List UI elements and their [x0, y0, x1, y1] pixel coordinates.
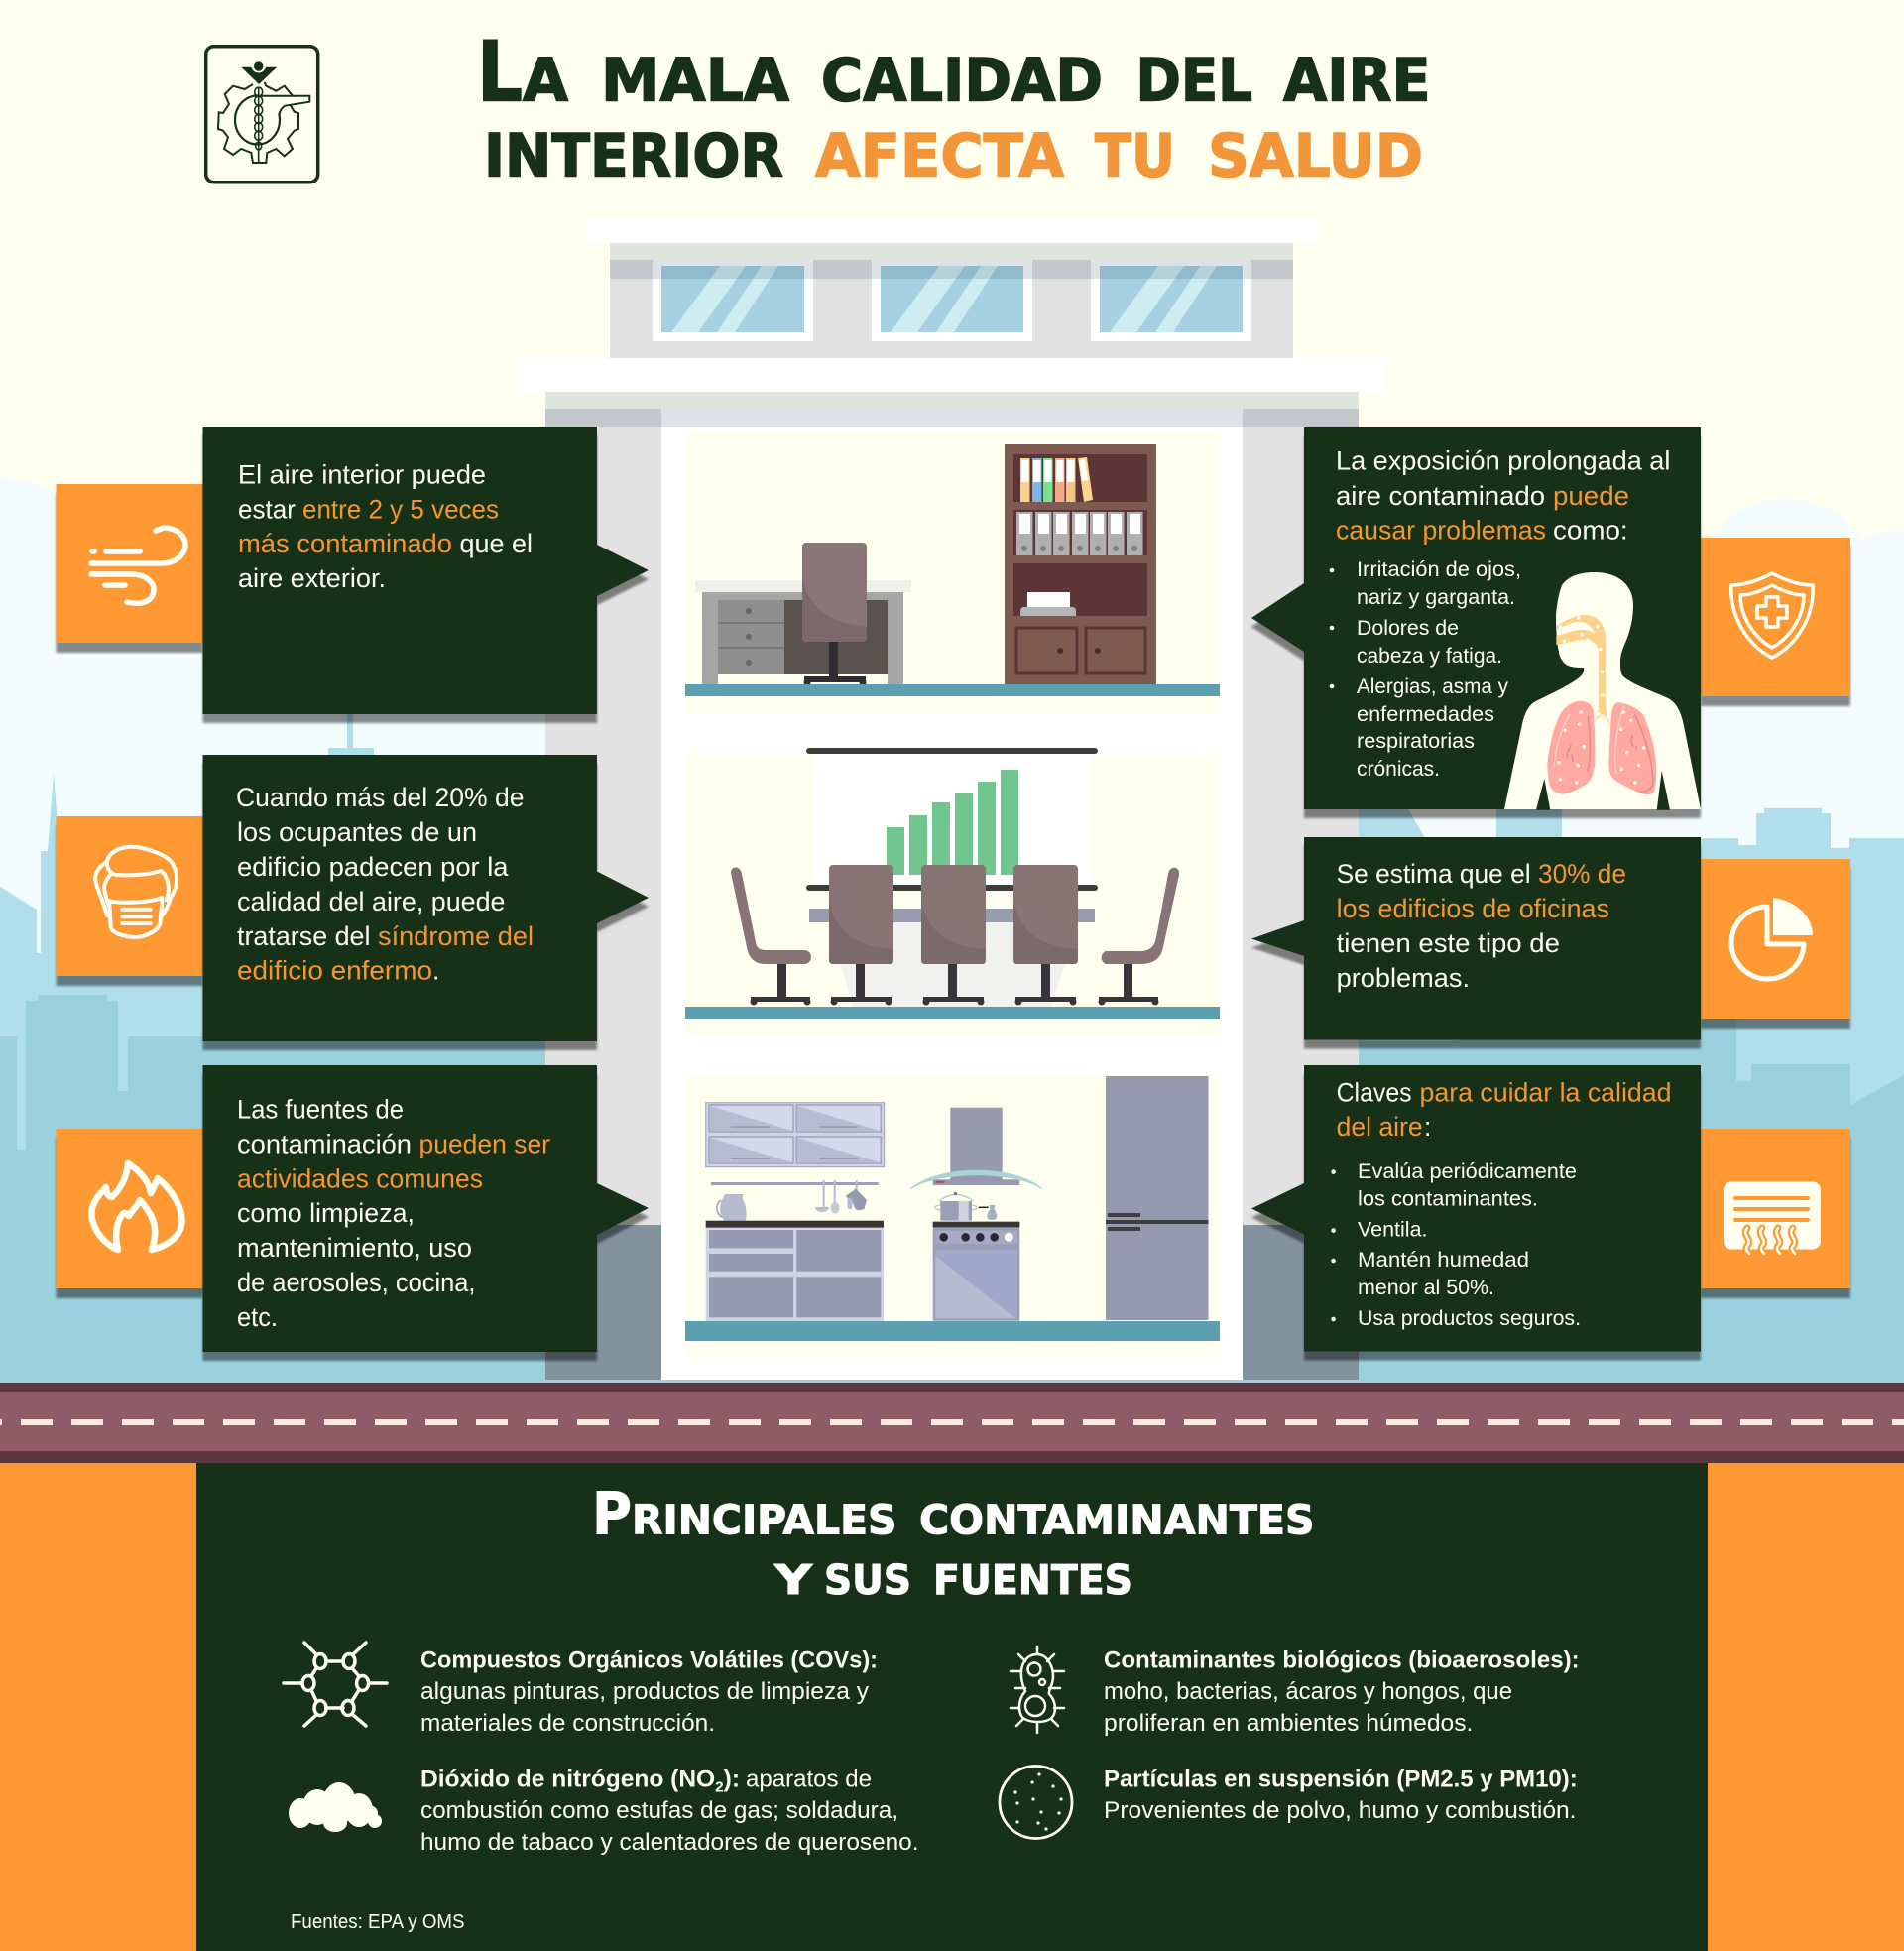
office chair — [802, 543, 867, 686]
columns — [545, 409, 661, 1380]
callout text: aire exterior. — [238, 563, 386, 593]
callout text: estar — [238, 494, 296, 524]
tips bullet list: Usa productos seguros. — [1358, 1306, 1581, 1330]
callout text — [236, 783, 534, 986]
icon: human respiratory system — [1504, 572, 1701, 810]
tips bullet list: Mantén humedad — [1358, 1248, 1529, 1272]
printer — [1020, 592, 1076, 616]
health bullet list: respiratorias — [1357, 729, 1475, 753]
tips bullet list: menor al 50%. — [1358, 1276, 1494, 1299]
callout text: actividades comunes — [237, 1164, 483, 1194]
callout text: . — [432, 956, 439, 986]
stove — [933, 1192, 1019, 1321]
bar chart — [887, 770, 1018, 875]
facade — [661, 409, 1243, 1380]
text: biological contaminants: proliferan en ambientes húmedos. — [1104, 1710, 1473, 1737]
health bullet list: crónicas. — [1357, 757, 1440, 781]
health bullet list: Dolores de — [1357, 616, 1459, 640]
top roof — [586, 217, 1318, 243]
health bullet list: cabeza y fatiga. — [1357, 644, 1502, 668]
text: particulate matter: Provenientes de polvo, humo y combustión. — [1104, 1797, 1577, 1824]
orange side bands — [0, 1463, 1904, 1951]
torch figure — [241, 58, 277, 84]
callout text: Las fuentes de — [237, 1095, 404, 1125]
tile: mask — [56, 816, 202, 986]
callout intro text: aire contaminado — [1336, 481, 1545, 511]
callout text: edificio padecen por la — [237, 852, 509, 882]
icon: wind — [91, 528, 185, 603]
icon: flame — [91, 1163, 181, 1250]
callout text: Cuando más del 20% de — [236, 783, 524, 812]
title line 2: TU — [1095, 121, 1175, 190]
panel: pollutants — [196, 1463, 1708, 1951]
section heading — [592, 1480, 1315, 1604]
text: nitrogen dioxide: Dióxido de nitrógeno (NO — [420, 1767, 709, 1793]
callout text: tratarse del — [237, 921, 371, 951]
meeting floor — [685, 1007, 1220, 1019]
callout intro text: causar problemas — [1336, 516, 1546, 546]
inner ring — [235, 95, 280, 145]
title line 2: AFECTA — [815, 121, 1065, 190]
section heading: Y — [774, 1556, 814, 1604]
lungs — [1547, 616, 1656, 794]
desk — [695, 580, 911, 685]
window 1 — [653, 260, 813, 341]
text: nitrogen dioxide: combustión como estufas de gas; soldadura, — [420, 1797, 898, 1824]
hood — [910, 1108, 1042, 1189]
projection screen — [812, 752, 1092, 891]
text: volatile organic compounds: algunas pinturas, productos de limpieza y — [420, 1678, 869, 1705]
callout intro text: como: — [1553, 516, 1628, 546]
health bullet list: Irritación de ojos, — [1357, 557, 1521, 581]
health bullet list: enfermedades — [1357, 702, 1494, 726]
table — [806, 885, 1098, 922]
text: nitrogen dioxide: humo de tabaco y calentadores de queroseno. — [420, 1829, 918, 1856]
right orange icon tiles — [1701, 538, 1850, 1298]
callout: interior air — [202, 427, 649, 723]
section heading: SUS — [824, 1556, 911, 1604]
health bullet list: Alergias, asma y — [1357, 674, 1508, 698]
sources: Fuentes: EPA y OMS — [291, 1911, 464, 1933]
white bar on skyline — [37, 813, 41, 953]
callout text: Se estima que el — [1337, 859, 1531, 889]
title line 1: CALIDAD — [821, 46, 1103, 115]
tips bullet list: Evalúa periódicamente — [1358, 1159, 1577, 1183]
road — [0, 1380, 1904, 1463]
bookshelf — [1005, 444, 1156, 684]
callout text: los ocupantes de un — [237, 817, 477, 847]
tips bullet list: Ventila. — [1358, 1218, 1428, 1242]
title line 2 — [484, 121, 1423, 190]
callout text: etc. — [237, 1302, 278, 1332]
staff — [255, 87, 263, 163]
skyline front layer — [0, 995, 1904, 1389]
bottom section — [0, 1463, 1904, 1951]
office floor — [685, 684, 1220, 696]
icon: bacteria — [1011, 1646, 1064, 1733]
callout intro text — [1336, 446, 1670, 546]
icon: pie chart — [1731, 898, 1813, 979]
callout text: entre 2 y 5 veces — [302, 494, 499, 524]
callout intro text: : — [1424, 1112, 1431, 1142]
text: nitrogen dioxide — [420, 1767, 918, 1856]
text: volatile organic compounds — [420, 1647, 878, 1737]
icon: cloud of gas — [289, 1782, 382, 1832]
title line 2: SALUD — [1208, 121, 1423, 190]
text: volatile organic compounds: Compuestos Orgánicos Volátiles (COVs): — [420, 1647, 878, 1674]
callout: office buildings — [1251, 837, 1701, 1049]
callout text: como limpieza, — [237, 1198, 415, 1228]
skyline back layer — [0, 714, 1904, 1389]
window 2 — [872, 260, 1032, 341]
callout intro text: La exposición prolongada al — [1336, 446, 1670, 476]
title line 1: MALA — [601, 46, 790, 115]
airway — [1556, 615, 1611, 728]
meeting chairs — [731, 865, 1179, 1006]
room: kitchen — [685, 1074, 1220, 1358]
title — [477, 24, 1430, 190]
middle roof — [518, 358, 1385, 392]
title line 1: AIRE — [1283, 46, 1430, 115]
room: meeting — [685, 748, 1220, 1036]
text: particulate matter: Partículas en suspensión (PM2.5 y PM10): — [1104, 1767, 1578, 1793]
icon: air conditioner — [1724, 1182, 1821, 1254]
fridge — [1106, 1076, 1208, 1320]
text: nitrogen dioxide: aparatos de — [746, 1767, 872, 1793]
callout text: contaminación — [237, 1130, 412, 1159]
callout text: que el — [460, 529, 533, 558]
callout text: El aire interior puede — [238, 460, 486, 490]
callout text: de aerosoles, cocina, — [237, 1268, 476, 1297]
sky and clouds — [0, 478, 1904, 1389]
section heading: P — [592, 1480, 632, 1547]
health bullet list — [1330, 557, 1521, 781]
left orange icon tiles — [56, 484, 202, 1298]
callout text — [1337, 859, 1626, 993]
callout intro text: Claves — [1337, 1077, 1412, 1107]
icon: shield — [1731, 573, 1813, 658]
tile: shield — [1701, 538, 1850, 706]
callout text: problemas. — [1337, 963, 1470, 993]
text: volatile organic compounds: materiales de construcción. — [420, 1710, 715, 1737]
callout text: edificio enfermo — [237, 956, 432, 986]
icon: molecule — [284, 1643, 387, 1726]
tile: air conditioner — [1701, 1129, 1850, 1298]
tips bullet list — [1331, 1159, 1581, 1330]
building — [518, 217, 1385, 1380]
title line 1 — [477, 24, 1430, 121]
callout text: síndrome del — [378, 921, 534, 951]
window 3 — [1091, 260, 1251, 341]
callout intro text: para cuidar la calidad — [1420, 1077, 1672, 1107]
callout: pollution sources — [202, 1065, 649, 1361]
text: biological contaminants — [1104, 1647, 1580, 1737]
section heading: CONTAMINANTES — [919, 1496, 1315, 1543]
callout intro text: puede — [1553, 481, 1629, 511]
logo — [206, 47, 318, 183]
title line 2: INTERIOR — [484, 121, 783, 190]
callout text: mantenimiento, uso — [237, 1233, 472, 1263]
counter — [706, 1221, 884, 1321]
callout: air quality tips — [1251, 1065, 1701, 1361]
callout: sick building syndrome — [202, 755, 649, 1050]
callout text: tienen este tipo de — [1337, 928, 1560, 958]
tile: pie chart — [1701, 859, 1850, 1029]
upper storey — [610, 243, 1293, 358]
text: nitrogen dioxide: ): — [724, 1767, 740, 1793]
room: office — [685, 431, 1220, 714]
callout: health effects — [1251, 427, 1701, 818]
callout text: pueden ser — [418, 1130, 550, 1159]
section heading: RINCIPALES — [632, 1496, 896, 1543]
callout text: los edificios de oficinas — [1337, 894, 1609, 923]
tips bullet list: los contaminantes. — [1358, 1186, 1538, 1210]
icon: suspended particles — [1000, 1766, 1072, 1839]
callout text: 30% de — [1538, 859, 1626, 889]
health bullet list: nariz y garganta. — [1357, 585, 1515, 609]
callout text: calidad del aire, puede — [237, 887, 506, 916]
section heading: FUENTES — [933, 1556, 1132, 1604]
callout intro text — [1337, 1077, 1672, 1142]
callout intro text: del aire — [1337, 1112, 1423, 1142]
callout text: más contaminado — [238, 529, 452, 558]
icon: face mask — [95, 847, 177, 937]
rail — [806, 748, 1098, 754]
text: particulate matter — [1104, 1767, 1578, 1824]
title line 1: A — [523, 46, 569, 115]
title line 1: DEL — [1136, 46, 1252, 115]
text: biological contaminants: Contaminantes biológicos (bioaerosoles): — [1104, 1647, 1580, 1674]
gray binders — [1016, 512, 1142, 555]
gear — [218, 82, 298, 163]
colored binders — [1020, 457, 1093, 502]
text: nitrogen dioxide: 2 — [715, 1779, 724, 1796]
text: biological contaminants: moho, bacterias, ácaros y hongos, que — [1104, 1678, 1512, 1705]
callout text — [237, 1095, 550, 1332]
kitchen floor — [685, 1321, 1220, 1341]
upper cabinets — [706, 1103, 885, 1167]
callout text — [238, 460, 533, 593]
pointer arm — [260, 96, 309, 114]
utensil rail — [711, 1180, 879, 1221]
tile: wind — [56, 484, 202, 653]
tile: flame — [56, 1129, 202, 1298]
title line 1: L — [477, 24, 523, 121]
